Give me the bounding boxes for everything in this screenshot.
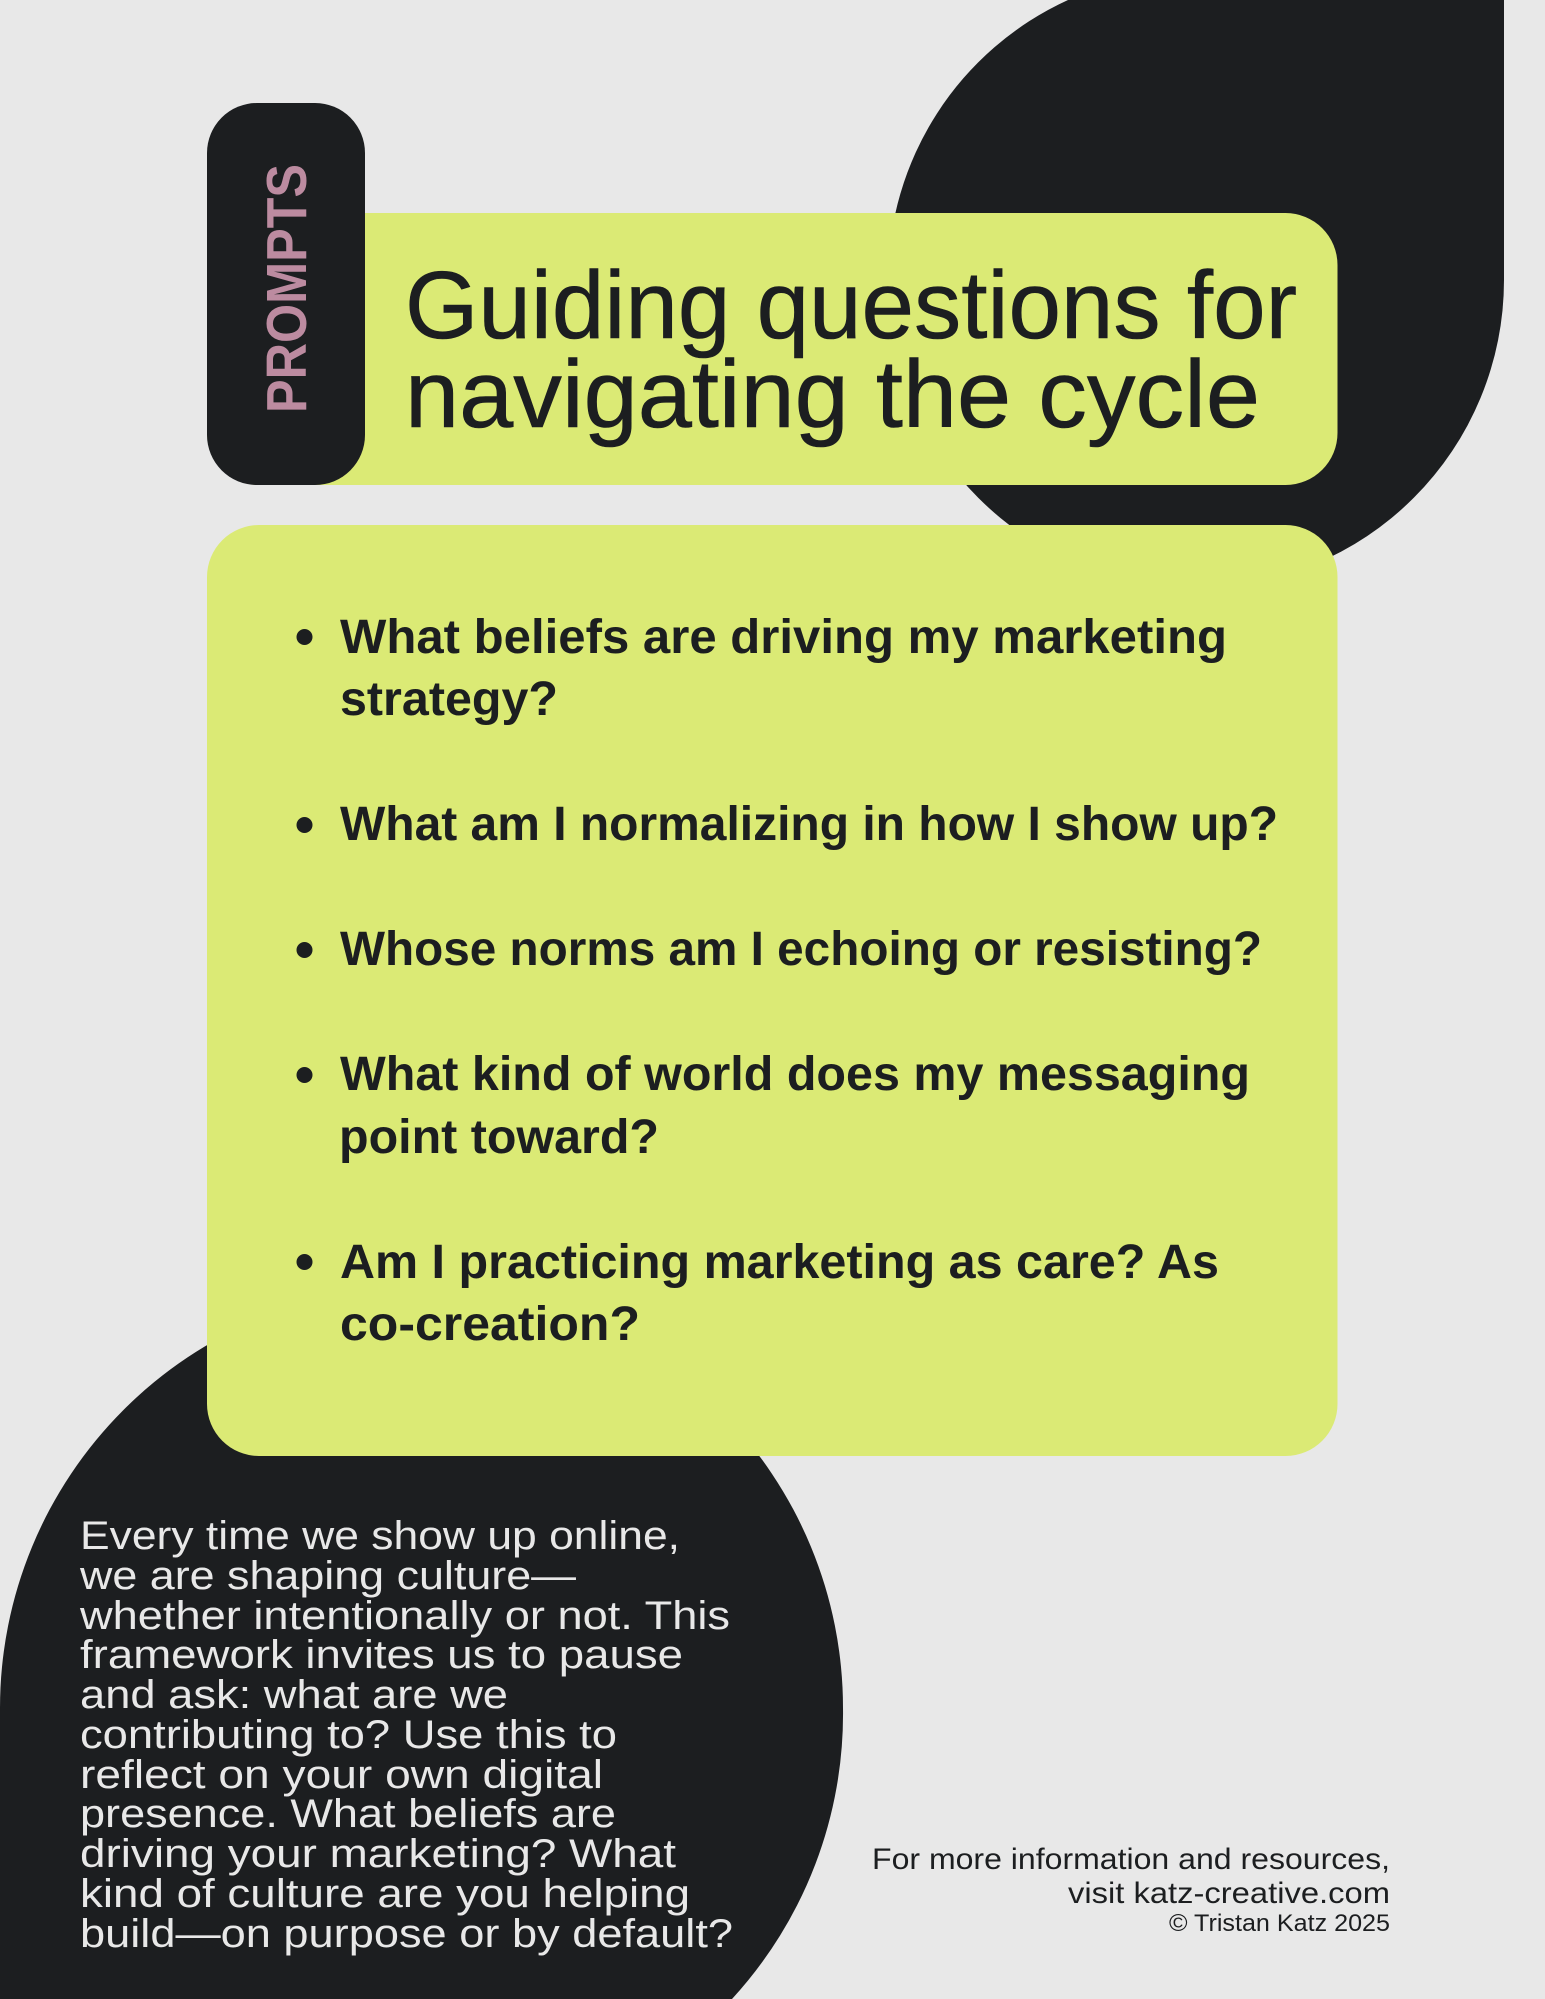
text block: reflection paragraph: presence. What beliefs are <box>80 1792 616 1836</box>
question 4 <box>296 1048 1250 1164</box>
text block: reflection paragraph: kind of culture are you helping <box>80 1872 690 1916</box>
text block: reflection paragraph: we are shaping culture— <box>79 1554 576 1598</box>
tab background <box>207 103 365 485</box>
text block: reflection paragraph: whether intentionally or not. This <box>79 1594 730 1638</box>
panel: title <box>207 213 1338 485</box>
tab: prompts label <box>207 103 365 485</box>
question 4: point toward? <box>339 1111 659 1164</box>
question 5: co-creation? <box>340 1298 640 1351</box>
text block: reflection paragraph: framework invites us to pause <box>80 1633 683 1677</box>
question 5: Am I practicing marketing as care? As <box>340 1236 1219 1289</box>
title <box>405 252 1297 448</box>
title: navigating the cycle <box>405 341 1260 448</box>
footer: resources and copyright: For more information and resources, <box>872 1843 1390 1876</box>
text block: reflection paragraph: Every time we show up online, <box>80 1514 680 1558</box>
text block: reflection paragraph: and ask: what are we <box>80 1673 508 1717</box>
text block: reflection paragraph: driving your marketing? What <box>80 1832 676 1876</box>
panel: guiding questions list <box>207 525 1338 1456</box>
text block: reflection paragraph <box>79 1514 733 1956</box>
decorative shape: bottom-left dark teardrop <box>0 1286 843 1999</box>
question 1: What beliefs are driving my marketing <box>340 611 1227 664</box>
footer: resources and copyright: visit katz-creative.com <box>1068 1877 1390 1910</box>
question 1: strategy? <box>340 673 558 726</box>
question 1 <box>296 611 1227 726</box>
footer: resources and copyright: © Tristan Katz 2025 <box>1169 1910 1390 1937</box>
question 4: What kind of world does my messaging <box>340 1048 1250 1101</box>
title background <box>207 213 1338 485</box>
title: Guiding questions for <box>405 252 1297 359</box>
footer: resources and copyright <box>872 1843 1390 1937</box>
text block: reflection paragraph: reflect on your own digital <box>80 1753 603 1797</box>
decorative shape: top-right dark teardrop <box>888 0 1504 588</box>
list background <box>207 525 1338 1456</box>
question 2: What am I normalizing in how I show up? <box>340 798 1278 851</box>
question 3: Whose norms am I echoing or resisting? <box>340 923 1262 976</box>
text block: reflection paragraph: contributing to? Use this to <box>80 1713 617 1757</box>
tab text: PROMPTS <box>255 164 319 413</box>
question 5 <box>296 1236 1219 1351</box>
text block: reflection paragraph: build—on purpose or by default? <box>80 1912 733 1956</box>
